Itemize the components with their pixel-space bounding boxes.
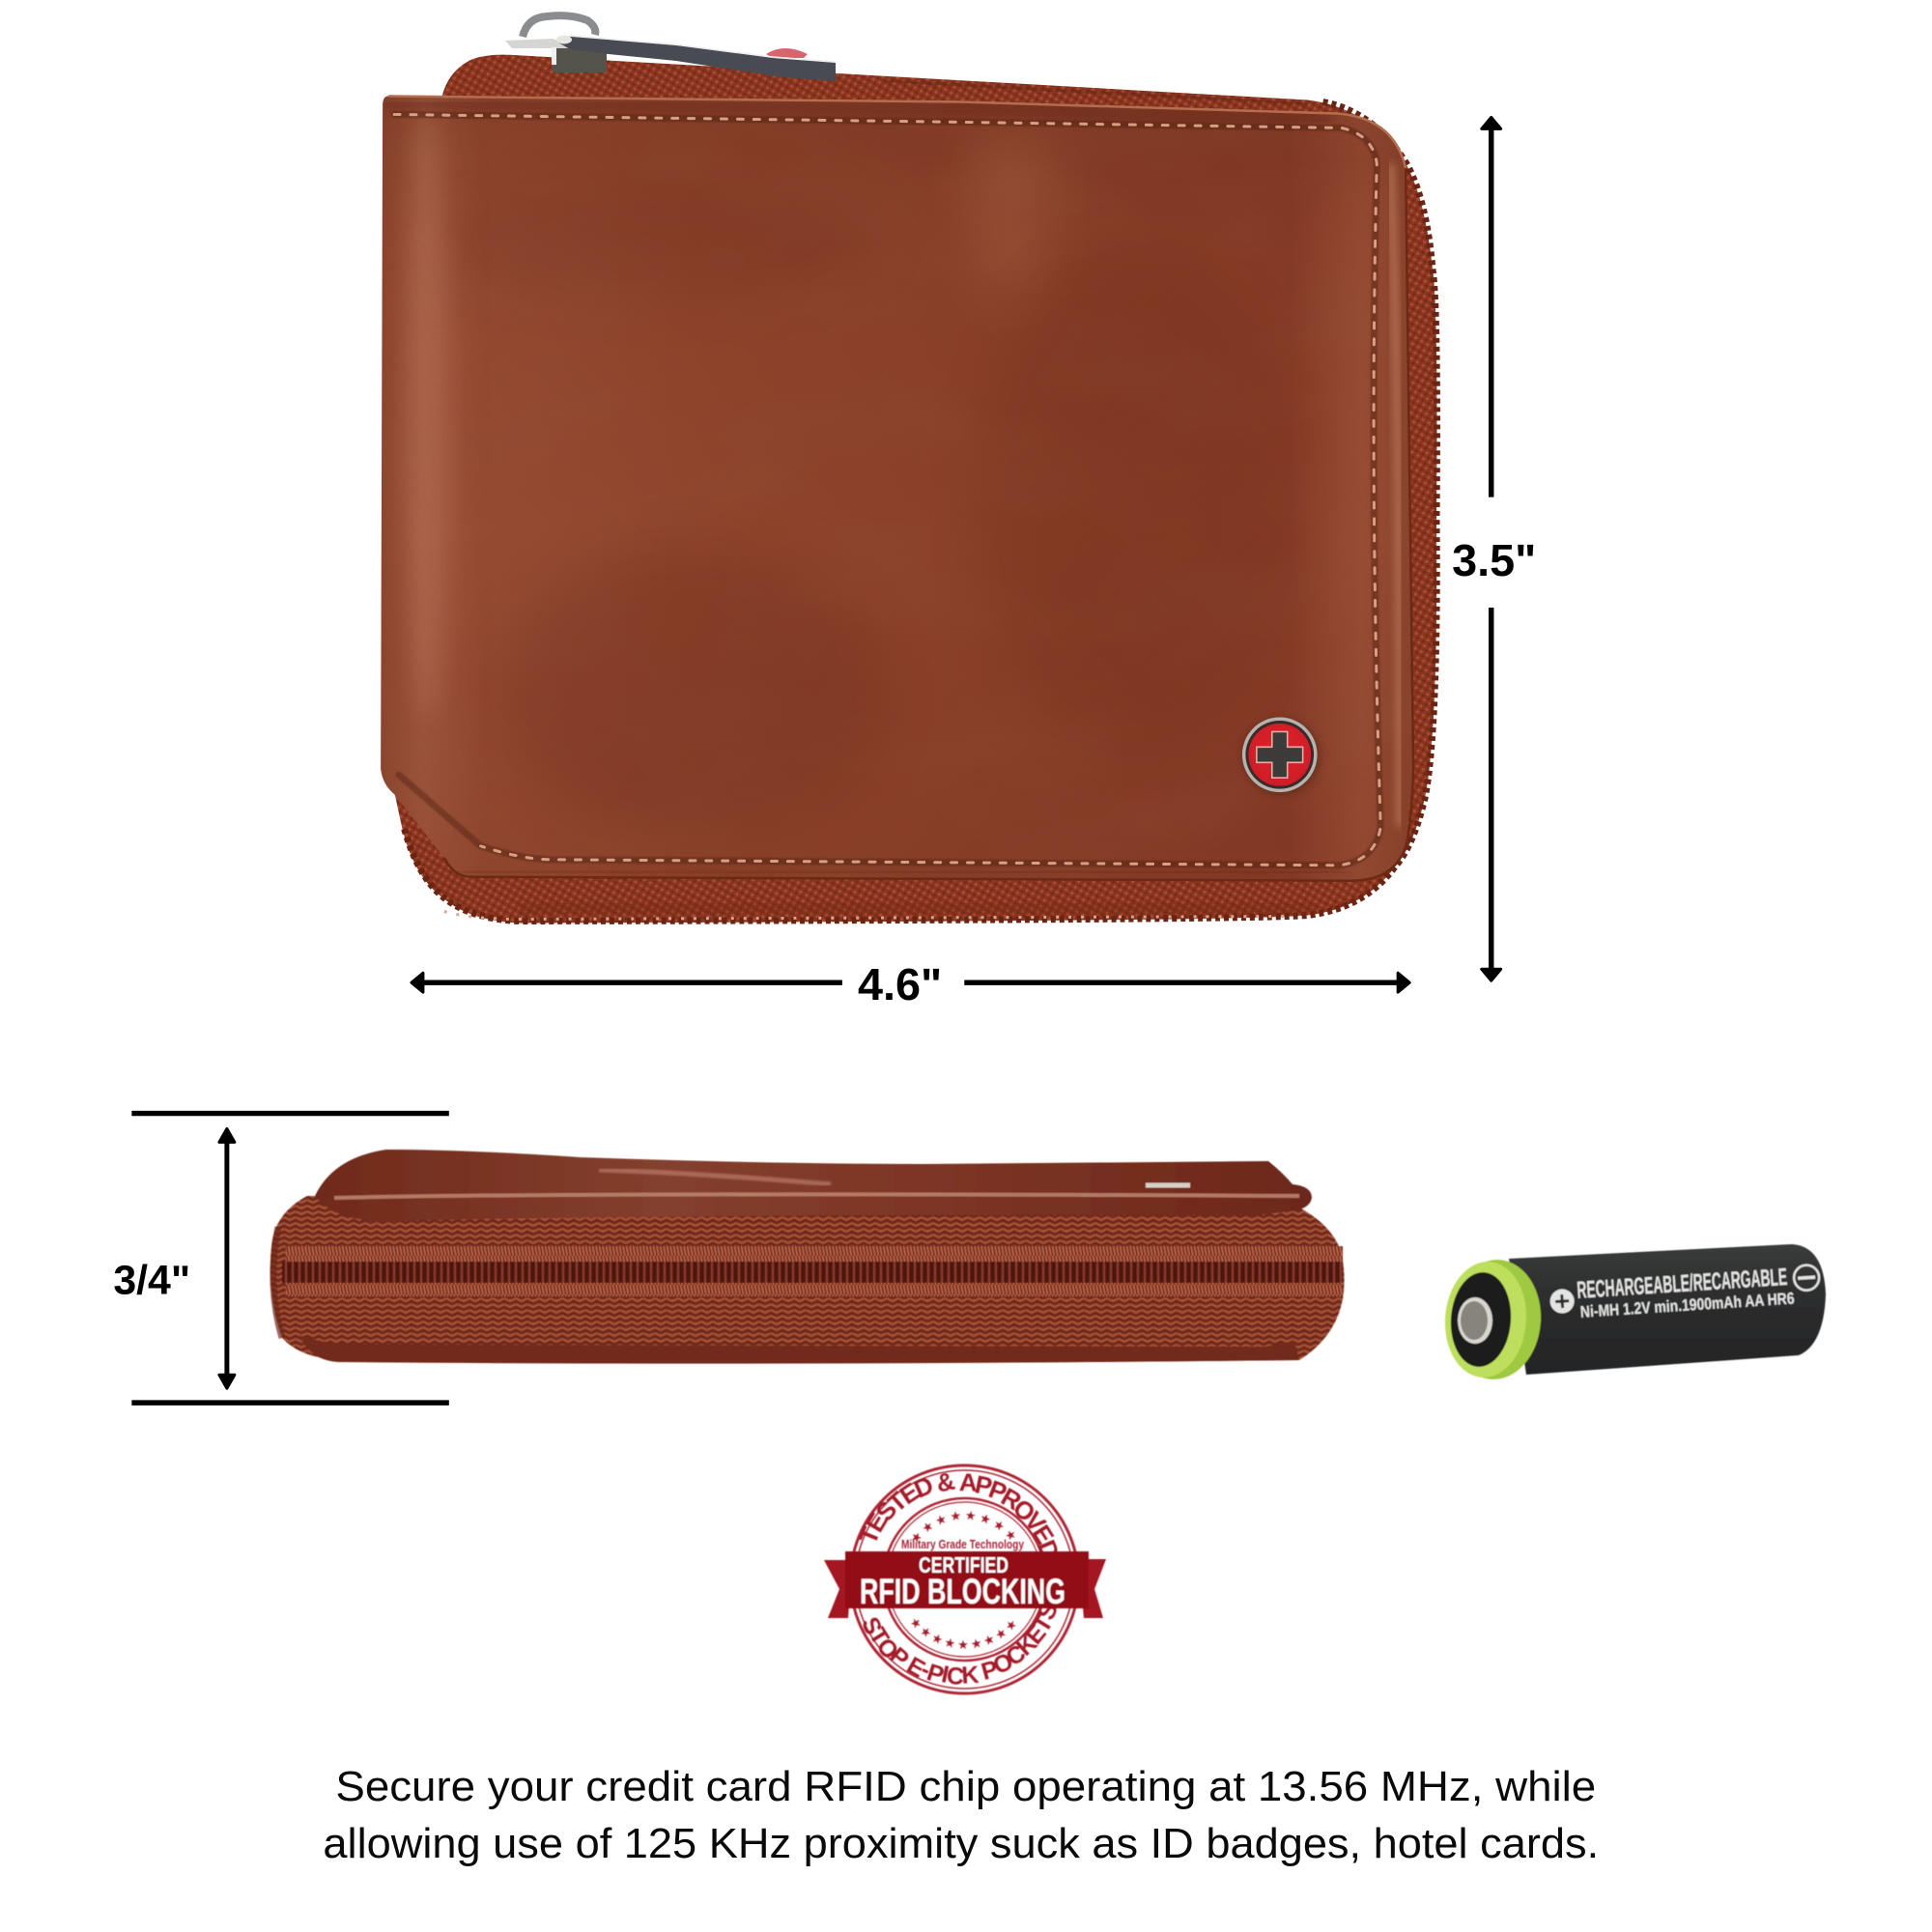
battery label bbox=[1548, 1262, 1821, 1323]
RFID blocking badge bbox=[823, 1463, 1107, 1696]
top arc text: TESTED & APPROVED bbox=[853, 1466, 1065, 1564]
ribbon: RFID BLOCKING bbox=[860, 1572, 1065, 1611]
wallet front view bbox=[375, 55, 1436, 923]
thickness dimension: 3/4" bbox=[113, 1258, 190, 1304]
AA battery bbox=[1441, 1244, 1826, 1382]
description text: Secure your credit card RFID chip operating at 13.56 MHz, while bbox=[335, 1763, 1596, 1810]
width dimension arrow: 4.6" bbox=[858, 959, 942, 1009]
stitching bbox=[394, 114, 1380, 866]
description text: allowing use of 125 KHz proximity suck as ID badges, hotel cards. bbox=[323, 1820, 1599, 1867]
badge rings bbox=[850, 1465, 1078, 1693]
star arcs: ★★★★★★★★★ bbox=[910, 1618, 1016, 1650]
fabric zipper body bbox=[270, 1196, 1345, 1363]
zipper pull bbox=[505, 15, 836, 81]
height dimension arrow bbox=[1452, 117, 1536, 980]
positive terminal ring bbox=[1441, 1257, 1545, 1382]
description text bbox=[323, 1763, 1599, 1867]
width dimension arrow bbox=[412, 959, 1409, 1009]
ribbon: CERTIFIED bbox=[919, 1552, 1009, 1577]
leather front panel bbox=[375, 92, 1423, 890]
battery label: Ni-MH 1.2V min.1900mAh AA HR6 bbox=[1579, 1290, 1795, 1321]
star arcs: ★★★★★★★★ bbox=[912, 1511, 1016, 1543]
zipper border bbox=[389, 55, 1436, 923]
bottom leather edge bbox=[299, 1335, 1299, 1364]
leather top edge bbox=[315, 1150, 1312, 1221]
bottom arc text: STOP E-PICK POCKETS bbox=[856, 1599, 1064, 1690]
brand snap bbox=[1242, 717, 1321, 796]
military grade line: Military Grade Technology bbox=[901, 1538, 1024, 1551]
height dimension arrow: 3.5" bbox=[1452, 535, 1536, 585]
zipper teeth bbox=[282, 1246, 1343, 1296]
ribbon bbox=[824, 1551, 1106, 1618]
star arcs bbox=[910, 1511, 1016, 1650]
battery body bbox=[1509, 1244, 1826, 1375]
wallet side view bbox=[270, 1150, 1345, 1364]
thickness dimension bbox=[113, 1114, 449, 1403]
